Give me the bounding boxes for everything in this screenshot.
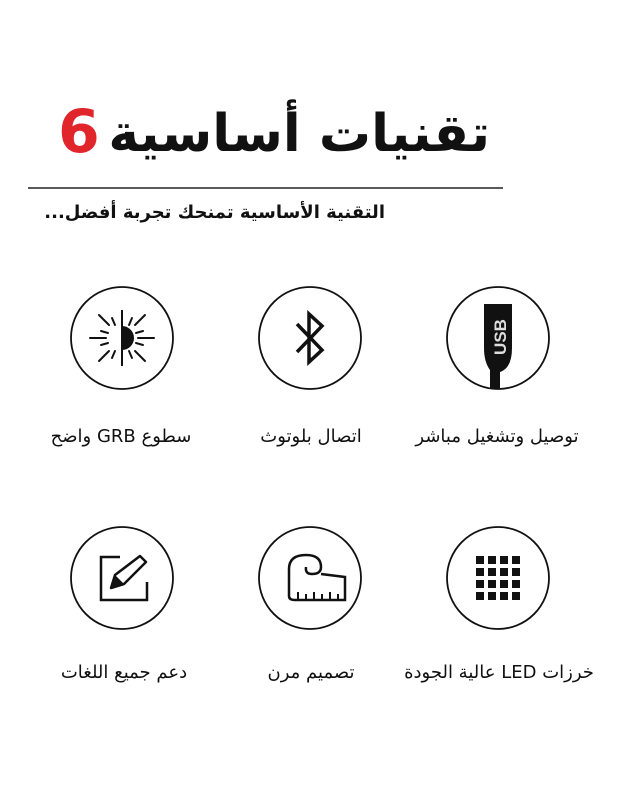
title: تقنيات أساسية	[108, 104, 490, 164]
label: brightness: سطوع GRB واضح	[51, 426, 191, 447]
icon: bluetooth	[259, 287, 361, 389]
icon: LED grid	[447, 527, 549, 629]
label: bluetooth: اتصال بلوتوث	[260, 426, 362, 447]
label: flexible design: تصميم مرن	[268, 662, 354, 683]
icon: usb	[447, 287, 549, 389]
icon: edit	[71, 527, 173, 629]
icon: usb: USB	[491, 319, 510, 355]
label: usb: توصيل وتشغيل مباشر	[415, 426, 579, 447]
subtitle: التقنية الأساسية تمنحك تجربة أفضل...	[44, 202, 385, 223]
icon: tape measure	[259, 527, 361, 629]
icon: brightness	[71, 287, 173, 389]
label: languages: دعم جميع اللغات	[61, 662, 187, 683]
title number: 6	[58, 97, 100, 167]
label: LED beads: خرزات LED عالية الجودة	[404, 662, 594, 683]
